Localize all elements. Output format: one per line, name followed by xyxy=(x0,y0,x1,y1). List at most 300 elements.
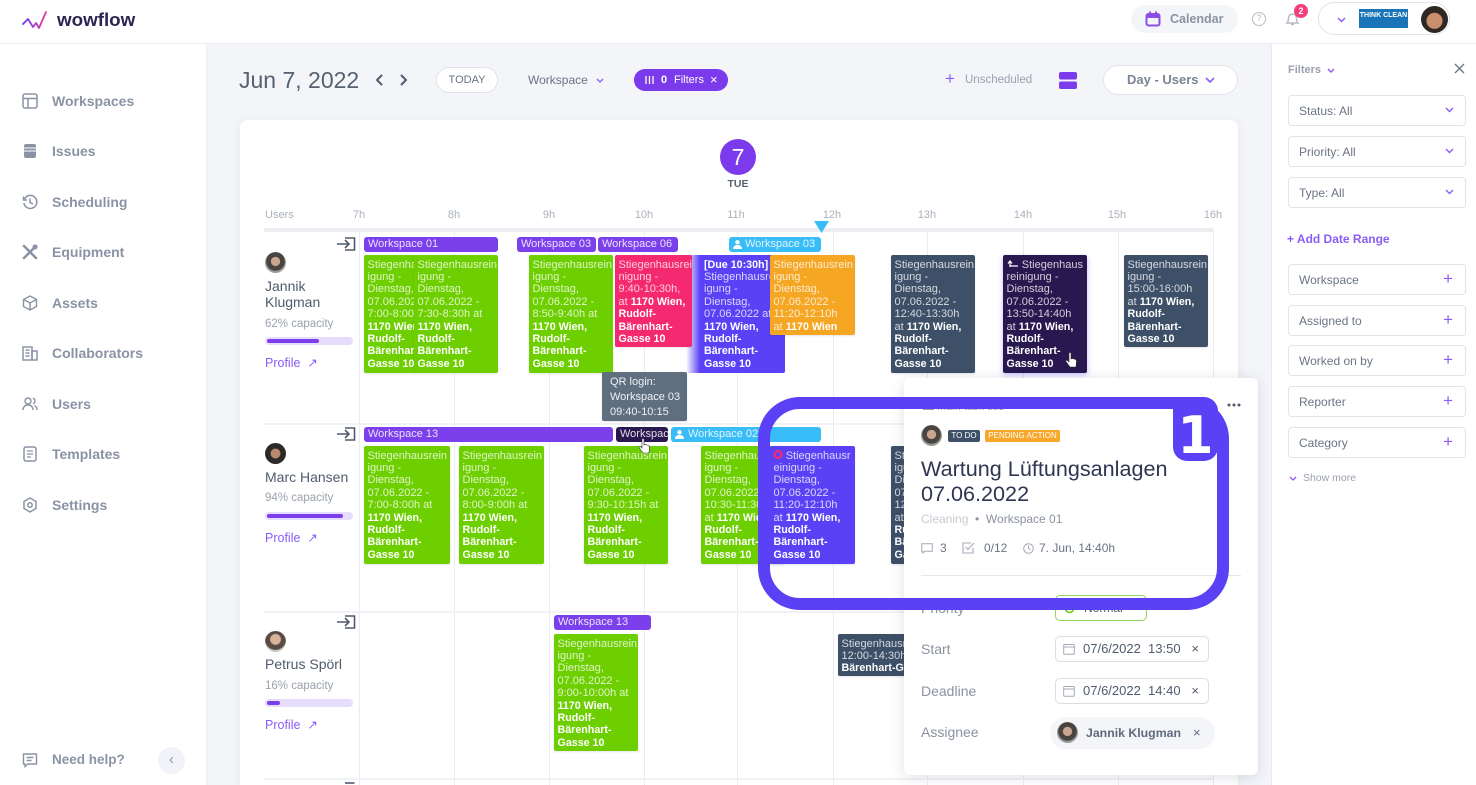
task card 11:20 blue: 11:20-12:10h xyxy=(774,499,838,511)
workspace dropdown: Workspace xyxy=(528,73,588,87)
filter panel xyxy=(1271,44,1476,785)
task card 7:30: Stiegenhausrein xyxy=(418,258,497,270)
task card behind panel: at 1170 Wien, xyxy=(894,512,961,524)
filter close xyxy=(1454,64,1464,74)
filter assigned to: Assigned to xyxy=(1299,314,1362,328)
add date range: + Add Date Range xyxy=(1287,232,1390,246)
view density icon xyxy=(1059,72,1077,89)
task card 7:00: Gasse 10 xyxy=(368,549,414,561)
nav: templates icon xyxy=(23,446,37,462)
task card 9:40 pink: Rudolf- xyxy=(618,308,656,320)
name: Petrus Spörl xyxy=(265,656,342,672)
task card 9:30: 9:30-10:15h at xyxy=(588,499,658,511)
task card 13:50 selected: reinigung - xyxy=(1006,271,1058,283)
workspace tag 13: Workspace 13 xyxy=(558,616,628,628)
task card 10:30: igung - xyxy=(704,462,738,474)
avatar xyxy=(265,443,286,464)
task title: Wartung Lüftungsanlagen xyxy=(921,456,1168,481)
task card 9:00: Bärenhart- xyxy=(558,724,612,736)
comments count: 3 xyxy=(940,541,947,555)
date icon xyxy=(1063,685,1075,697)
task card due 10:30 blue: igung - xyxy=(704,283,738,295)
task card 8:50: 07.06.2022 - xyxy=(532,296,594,308)
alert icon xyxy=(773,450,783,460)
task card 9:40 pink: at 1170 Wien, xyxy=(618,296,685,308)
task card 9:40 pink: Bärenhart- xyxy=(618,321,673,333)
task card 9:00: 1170 Wien, xyxy=(558,700,612,712)
assignee chip xyxy=(1050,717,1215,749)
task card behind panel: 12:40-13:30h xyxy=(894,499,959,511)
task card 9:00: Dienstag, xyxy=(558,662,604,674)
task card due 10:30 blue: Dienstag, xyxy=(704,296,750,308)
task card 15:00: 15:00-16:00h xyxy=(1128,283,1192,295)
category line: Cleaning • Workspace 01 xyxy=(921,512,1062,526)
unscheduled plus: + xyxy=(945,69,955,88)
task card due 10:30 blue: Stiegenhausrein xyxy=(704,271,784,283)
top bar xyxy=(0,0,1476,44)
main task link: ▬ Main task title xyxy=(923,401,1004,413)
hour labels: 12h xyxy=(823,209,841,221)
chevron xyxy=(1445,148,1454,154)
pending action badge xyxy=(985,430,1060,442)
hour labels: 10h xyxy=(635,209,653,221)
task card 9:30: Stiegenhausrein xyxy=(588,450,667,462)
deadline date xyxy=(1055,678,1209,704)
task card 10:30: 07.06.2022 - xyxy=(704,487,766,499)
task card 8:50: igung - xyxy=(532,271,566,283)
task card 10:30: Gasse 10 xyxy=(704,549,751,561)
chevron xyxy=(1445,107,1454,113)
nav: assets icon xyxy=(22,295,38,311)
task card 11:20 blue: Rudolf- xyxy=(774,524,811,536)
task card due 10:30 blue: Rudolf- xyxy=(704,333,741,345)
avatar xyxy=(921,425,942,446)
task card 7:00: Stiegenhausrein xyxy=(368,450,447,462)
task card 7:30: Rudolf- xyxy=(418,333,455,345)
notification bell xyxy=(1285,13,1300,26)
start label: Start xyxy=(921,641,951,657)
profile link: Profile ↗ xyxy=(265,718,318,732)
hour labels: 13h xyxy=(918,209,936,221)
nav: templates: Templates xyxy=(52,446,120,462)
nav: workspaces icon xyxy=(22,93,38,109)
users column label: Users xyxy=(265,209,294,221)
pending action badge: PENDING ACTION xyxy=(988,431,1057,440)
task card 12:40: at 1170 Wien, xyxy=(894,321,961,333)
hour labels: 14h xyxy=(1014,209,1032,221)
user row: Marc Hansen xyxy=(265,427,356,545)
task card 12:00 xyxy=(838,634,928,676)
task card 9:40 pink xyxy=(615,255,692,347)
assignee avatar xyxy=(1057,722,1078,743)
day name: TUE xyxy=(728,178,748,190)
divider xyxy=(921,575,1241,576)
task card 12:40: igung - xyxy=(894,271,928,283)
task card 8:00: Dienstag, xyxy=(462,474,509,486)
workspace tag 02 xyxy=(671,427,821,442)
task card 9:30: Rudolf- xyxy=(588,524,625,536)
task card 7:00: Gasse 10 xyxy=(368,358,414,370)
task card 15:00: Stiegenhausrein xyxy=(1128,258,1207,270)
task card 10:30: 10:30-11:30h xyxy=(704,499,769,511)
task card 11:20 blue: at 1170 Wien, xyxy=(774,512,840,524)
workspace tag 01: Workspace 01 xyxy=(368,238,438,250)
collapse sidebar button xyxy=(158,747,185,774)
filter workspace: Workspace xyxy=(1299,273,1359,287)
nav: assets: Assets xyxy=(52,295,98,311)
notification badge xyxy=(1294,4,1308,18)
filter priority xyxy=(1288,136,1466,167)
task card due 10:30 blue: Gasse 10 xyxy=(704,358,751,370)
subtask icon xyxy=(1008,260,1018,267)
show more chevron xyxy=(1289,476,1297,482)
assignee remove: × xyxy=(1193,725,1201,740)
task card behind panel: igung - xyxy=(894,462,928,474)
task card 9:00: Rudolf- xyxy=(558,712,595,724)
task card 9:00: igung - xyxy=(558,650,591,662)
task card 12:40: Gasse 10 xyxy=(894,358,941,370)
hour labels: 16h xyxy=(1204,209,1222,221)
nav: collaborators icon xyxy=(22,346,38,361)
filter type: Type: All xyxy=(1299,186,1344,200)
nav: users icon xyxy=(22,397,38,410)
task card 12:40 xyxy=(891,255,975,373)
task card 10:30: Stiegenhausrein xyxy=(704,450,784,462)
task card 8:50: Bärenhart- xyxy=(532,345,587,357)
assign icon xyxy=(337,237,356,251)
task card 12:40: 12:40-13:30h xyxy=(894,308,959,320)
task card 8:00: 8:00-9:00h at xyxy=(462,499,527,511)
date icon xyxy=(1063,643,1075,655)
task card 8:00: Gasse 10 xyxy=(462,549,509,561)
task card 8:50 xyxy=(529,255,613,373)
capacity: 94% capacity xyxy=(265,492,333,504)
task card 12:40: Stiegenhausrein xyxy=(894,258,974,270)
workspace chevron xyxy=(596,78,604,83)
task detail popup xyxy=(904,378,1258,775)
person icon xyxy=(675,430,684,439)
company logo xyxy=(1359,9,1408,28)
person icon xyxy=(733,240,742,249)
task card 11:20 blue xyxy=(770,446,855,564)
task card due 10:30 blue: 1170 Wien, xyxy=(704,321,759,333)
user row: Petrus Spörl xyxy=(265,615,356,732)
task card 12:00: Bärenhart-Gasse xyxy=(842,662,928,674)
task card 10:30 xyxy=(701,446,785,564)
task card 9:30: Gasse 10 xyxy=(588,549,634,561)
task card 11:20 blue: 07.06.2022 - xyxy=(774,487,835,499)
task card 7:30: 1170 Wien, xyxy=(418,321,472,333)
task card 11:20 orange xyxy=(770,255,855,335)
task card 9:30: Bärenhart- xyxy=(588,536,642,548)
task card 12:40: Dienstag, xyxy=(894,283,941,295)
chevron xyxy=(1445,189,1454,195)
filter priority: Priority: All xyxy=(1299,145,1356,159)
task card behind panel: Bärenhart- xyxy=(894,536,949,548)
task card 12:00: Stiegenhausrein xyxy=(842,638,921,650)
task card 7:30: Gasse 10 xyxy=(418,358,464,370)
name: Jannik xyxy=(265,278,305,294)
task card 9:40 pink: Stiegenhausrei xyxy=(618,258,692,270)
filter category xyxy=(1288,427,1466,458)
task card 15:00: at 1170 Wien, xyxy=(1128,296,1194,308)
priority value xyxy=(1055,595,1147,621)
help icon xyxy=(1252,12,1266,26)
task card 12:40: 07.06.2022 - xyxy=(894,296,956,308)
task card 15:00: Bärenhart- xyxy=(1128,321,1182,333)
task card 8:50: Rudolf- xyxy=(532,333,570,345)
capacity bar xyxy=(265,337,353,345)
filter category: + xyxy=(1443,432,1453,451)
task card 11:20 blue: Stiegenhausr xyxy=(786,450,851,462)
filters label: Filters xyxy=(674,74,704,86)
task card 7:00: 1170 Wien, xyxy=(368,512,422,524)
calendar card xyxy=(240,120,1238,785)
nav: scheduling icon xyxy=(22,194,38,210)
task card 11:20 orange: 07.06.2022 - xyxy=(774,296,835,308)
task card 13:50 selected: Bärenhart- xyxy=(1006,345,1061,357)
need help: Need help? xyxy=(52,752,125,767)
account switcher xyxy=(1318,2,1450,35)
to do badge xyxy=(948,430,980,442)
task card 13:50 selected: 13:50-14:40h xyxy=(1006,308,1071,320)
nav: users: Users xyxy=(52,396,91,412)
nav: scheduling: Scheduling xyxy=(52,194,127,210)
task card 7:30: 7:30-8:30h at xyxy=(418,308,482,320)
task card 11:20 blue: Gasse 10 xyxy=(774,549,820,561)
workspace tag 13 xyxy=(364,427,613,442)
view selector xyxy=(1103,65,1238,95)
task card 7:00: Rudolf- xyxy=(368,333,405,345)
task card 11:20 blue: Dienstag, xyxy=(774,474,820,486)
cursor on selected card xyxy=(1066,352,1077,368)
task card 13:50 selected: Dienstag, xyxy=(1006,283,1053,295)
hour labels: 15h xyxy=(1108,209,1126,221)
task card 12:40: Rudolf- xyxy=(894,333,932,345)
unscheduled label: Unscheduled xyxy=(965,74,1032,86)
assign icon xyxy=(337,615,356,629)
task card 13:50 selected: Gasse 10 xyxy=(1006,358,1053,370)
task card 7:30: Bärenhart- xyxy=(418,345,472,357)
task card 15:00 xyxy=(1124,255,1208,347)
task card 11:20 blue: Bärenhart- xyxy=(774,536,828,548)
today button xyxy=(436,67,498,93)
task card 7:00: 07.06.2022 - xyxy=(368,487,429,499)
workspace tag 03 assigned: Workspace 03 xyxy=(745,238,815,250)
task card 7:00: Bärenhart- xyxy=(368,536,422,548)
task card 11:20 orange: Stiegenhausrein xyxy=(774,258,853,270)
task card 13:50 selected: Stiegenhaus xyxy=(1022,258,1083,270)
workspace tag 06: Workspace 06 xyxy=(602,238,672,250)
task card 15:00: Rudolf- xyxy=(1128,308,1165,320)
row 4 assign icon xyxy=(345,782,354,784)
filter status xyxy=(1288,95,1466,126)
task card 9:00: Stiegenhausrein xyxy=(558,638,637,650)
task card 7:00: Dienstag, xyxy=(368,474,414,486)
capacity bar xyxy=(265,512,353,520)
task card 7:00: Rudolf- xyxy=(368,524,405,536)
filter assigned to: + xyxy=(1443,310,1453,329)
task card 9:30: 1170 Wien, xyxy=(588,512,642,524)
workspace tag 03 assigned xyxy=(729,237,821,252)
hour labels: 8h xyxy=(448,209,460,221)
filter heading chevron xyxy=(1328,68,1334,73)
calendar icon xyxy=(1146,12,1160,26)
QR login card: QR login: xyxy=(610,376,656,388)
task card 10:30: Bärenhart- xyxy=(704,536,759,548)
workspace tag 03: Workspace 03 xyxy=(521,238,591,250)
workspace tag 13: Workspace 13 xyxy=(368,428,438,440)
task card 8:00: 07.06.2022 - xyxy=(462,487,524,499)
QR login card: Workspace 03 xyxy=(610,391,680,403)
assignee label: Assignee xyxy=(921,724,979,740)
task card 13:50 selected xyxy=(1003,255,1087,373)
filter status: Status: All xyxy=(1299,104,1352,118)
task card 9:00: Gasse 10 xyxy=(558,737,604,749)
filter worked on by: Worked on by xyxy=(1299,354,1373,368)
view selector chevron xyxy=(1206,77,1214,83)
avatar xyxy=(265,252,286,273)
task card 8:00: igung - xyxy=(462,462,496,474)
account avatar xyxy=(1421,6,1448,33)
need help icon xyxy=(22,753,38,768)
nav: settings icon xyxy=(23,497,37,513)
company logo: THINK CLEAN xyxy=(1360,12,1407,19)
collapse sidebar button: ‹ xyxy=(169,751,174,768)
task card behind panel: Stiegenhausrein xyxy=(894,450,974,462)
clock icon xyxy=(1023,543,1034,554)
filter worked on by xyxy=(1288,345,1466,376)
task card 10:30: Rudolf- xyxy=(704,524,742,536)
filters count: 0 xyxy=(661,74,667,86)
logo mark xyxy=(22,11,47,29)
filter reporter: + xyxy=(1443,391,1453,410)
profile link: Profile ↗ xyxy=(265,531,318,545)
task card 9:30: Dienstag, xyxy=(588,474,634,486)
QR login card: 09:40-10:15 xyxy=(610,406,669,418)
task card 7:00: 7:00-8:00h at xyxy=(368,499,432,511)
cursor on workspace tag xyxy=(638,438,650,454)
next day arrow xyxy=(400,74,408,86)
task card 8:50: 8:50-9:40h at xyxy=(532,308,597,320)
calendar button xyxy=(1131,5,1238,33)
account chevron xyxy=(1338,18,1346,22)
filters pill xyxy=(634,69,728,91)
hour labels xyxy=(353,209,1222,221)
nav: workspaces: Workspaces xyxy=(52,93,134,109)
task card 8:00: Rudolf- xyxy=(462,524,500,536)
filters clear: × xyxy=(710,72,718,87)
capacity bar xyxy=(265,699,353,707)
workspace tag 01 xyxy=(364,237,498,252)
task card 8:50: Gasse 10 xyxy=(532,358,579,370)
task card 9:30: igung - xyxy=(588,462,621,474)
nav: equipment: Equipment xyxy=(52,244,124,260)
nav: issues: Issues xyxy=(52,143,96,159)
QR login card xyxy=(602,372,687,421)
hour labels: 9h xyxy=(543,209,555,221)
start date: 07/6/2022 13:50 × xyxy=(1083,641,1199,656)
task title: 07.06.2022 xyxy=(921,481,1029,506)
task card due 10:30 blue xyxy=(686,255,785,373)
priority value: Normal xyxy=(1084,601,1123,615)
task card behind panel: Gasse 10 xyxy=(894,549,941,561)
task card 9:40 pink: 9:40-10:30h, xyxy=(618,283,680,295)
filter sliders icon xyxy=(645,76,654,84)
assign icon xyxy=(337,427,356,441)
day badge: 7 xyxy=(732,144,744,170)
workspace tag 02: Workspace 02 xyxy=(688,428,758,440)
task card 8:00: Stiegenhausrein xyxy=(462,450,542,462)
current time marker xyxy=(814,221,829,233)
deadline label: Deadline xyxy=(921,683,976,699)
deadline date: 07/6/2022 14:40 × xyxy=(1083,683,1199,698)
task card 7:00: igung - xyxy=(368,271,401,283)
view selector: Day - Users xyxy=(1127,72,1199,87)
task card 9:00: 07.06.2022 - xyxy=(558,675,619,687)
task card behind panel: Rudolf- xyxy=(894,524,932,536)
task card 10:30: Dienstag, xyxy=(704,474,751,486)
task card 8:00: 1170 Wien, xyxy=(462,512,517,524)
hour labels: 7h xyxy=(353,209,365,221)
name: Marc Hansen xyxy=(265,469,348,485)
notification badge: 2 xyxy=(1298,6,1304,16)
task card 12:40: Bärenhart- xyxy=(894,345,949,357)
task card 12:00: 12:00-14:30h at xyxy=(842,650,919,662)
task card behind panel xyxy=(891,446,975,564)
nav: equipment icon xyxy=(22,244,38,260)
task card 7:00: Dienstag, xyxy=(368,283,414,295)
filter worked on by: + xyxy=(1443,350,1453,369)
priority indicator xyxy=(1064,603,1075,614)
filter workspace: + xyxy=(1443,269,1453,288)
task card 9:00: 9:00-10:00h at xyxy=(558,687,628,699)
callout frame xyxy=(758,397,1229,610)
task card 9:30: 07.06.2022 - xyxy=(588,487,649,499)
task card 15:00: Gasse 10 xyxy=(1128,333,1174,345)
to do badge: TO DO xyxy=(951,431,977,440)
task card behind panel: 07.06.2022 - xyxy=(894,487,956,499)
task card 11:20 orange: 11:20-12:10h xyxy=(774,308,838,320)
filter reporter: Reporter xyxy=(1299,395,1346,409)
task card 9:30 xyxy=(584,446,668,564)
more menu xyxy=(1227,403,1241,407)
date heading: Jun 7, 2022 xyxy=(239,67,359,93)
workspace tag 13 xyxy=(554,615,651,630)
callout number badge: 1 xyxy=(1177,406,1214,466)
capacity: 16% capacity xyxy=(265,680,333,692)
start date xyxy=(1055,636,1209,662)
task card 11:20 blue: einigung - xyxy=(774,462,822,474)
due date: 7. Jun, 14:40h xyxy=(1039,541,1115,555)
task card 9:00 xyxy=(554,634,638,751)
stats line xyxy=(921,540,1131,556)
task card due 10:30 blue: 07.06.2022 at xyxy=(704,308,771,320)
today button: TODAY xyxy=(449,74,485,86)
task card 7:30: 07.06.2022 - xyxy=(418,296,479,308)
task card 7:00: igung - xyxy=(368,462,401,474)
task card 7:30 xyxy=(414,255,498,373)
comments icon xyxy=(921,543,933,554)
filter reporter xyxy=(1288,386,1466,417)
logo wordmark: wowflow xyxy=(57,9,135,30)
assignee chip: Jannik Klugman xyxy=(1086,726,1181,740)
filter type xyxy=(1288,177,1466,208)
name xyxy=(265,278,320,310)
priority label: Priority xyxy=(921,600,965,616)
task card 11:20 orange: igung - xyxy=(774,271,807,283)
task card 7:30: Dienstag, xyxy=(418,283,464,295)
